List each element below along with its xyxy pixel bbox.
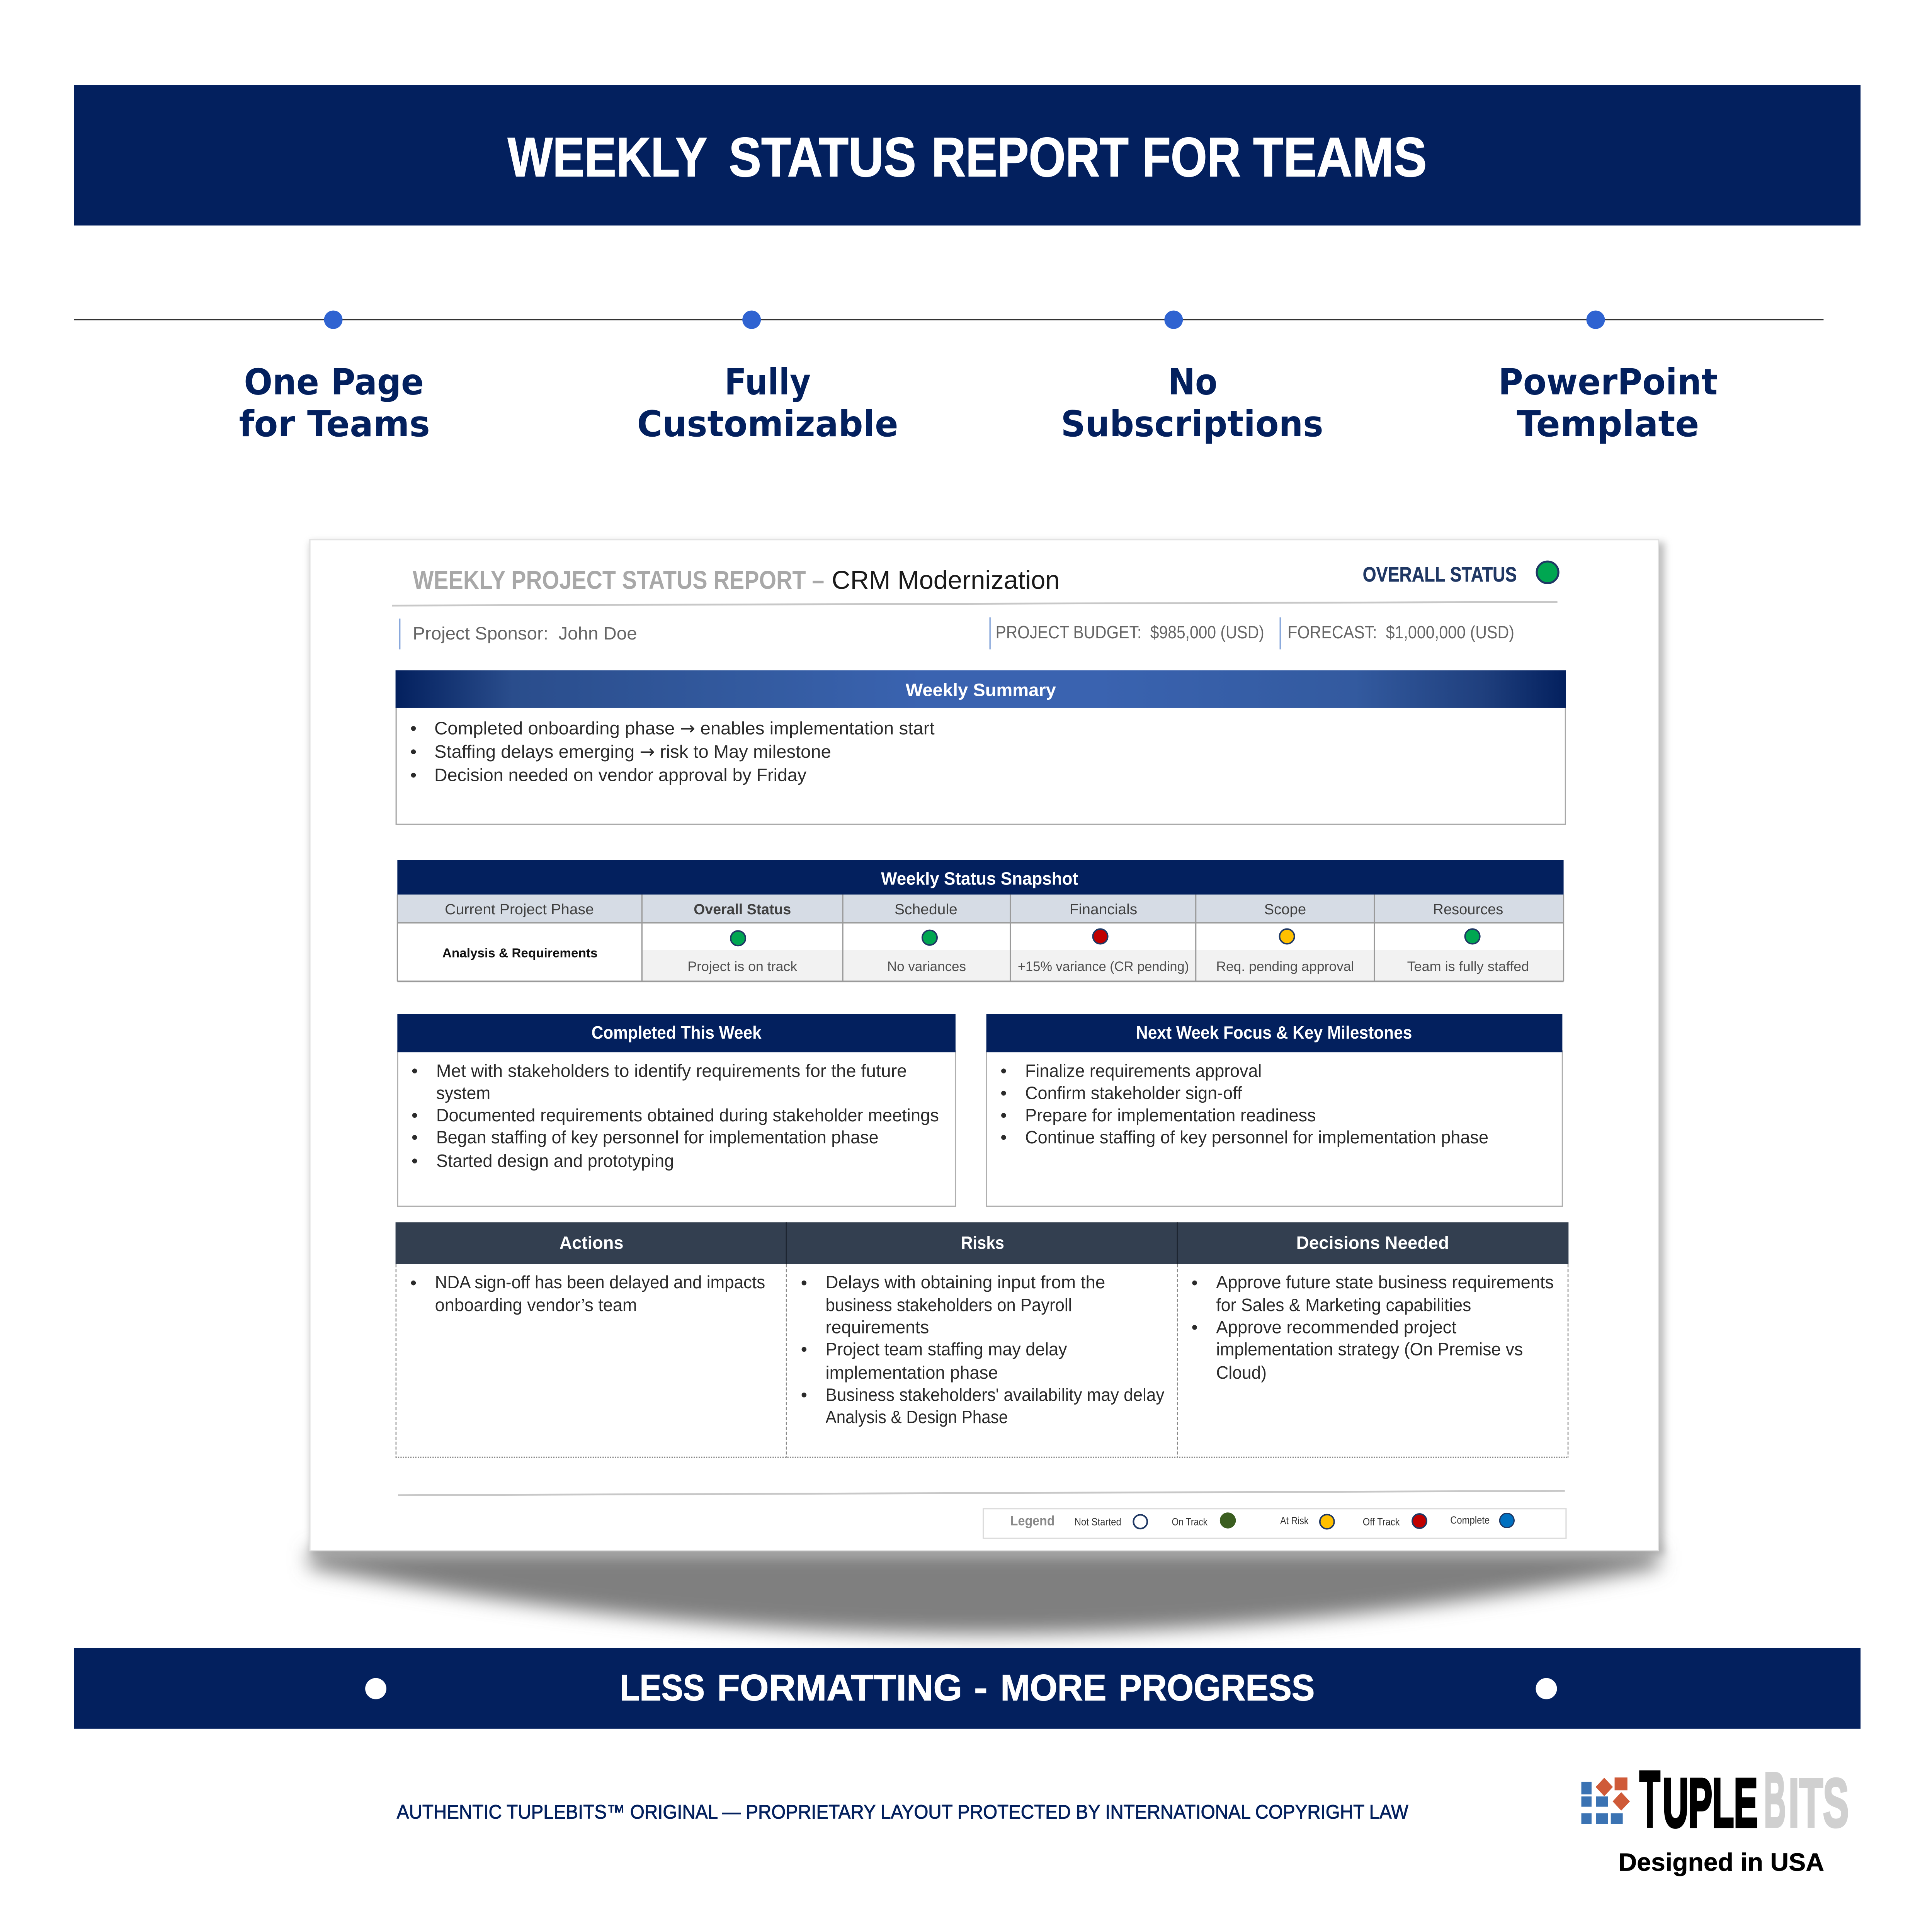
- panel: next week focus and key milestones: •: [1000, 1127, 1007, 1147]
- panel: completed this week: •: [412, 1151, 418, 1171]
- panel: weekly status snapshot: [397, 860, 1564, 981]
- feature: powerpoint template: Template: [1517, 403, 1699, 445]
- project meta: [400, 617, 1514, 649]
- panel: weekly status snapshot: +15% variance (CR pending): [1018, 959, 1189, 974]
- title banner: [74, 85, 1861, 226]
- panel: next week focus and key milestones: Finalize requirements approval: [1025, 1061, 1262, 1081]
- legend: Legend: [1010, 1514, 1055, 1529]
- column: actions: onboarding vendor’s team: [435, 1295, 637, 1315]
- designed in usa: Designed in USA: [1618, 1848, 1824, 1876]
- legend: Complete: [1450, 1514, 1490, 1526]
- panel: weekly summary: •: [410, 765, 417, 785]
- feature: fully customizable: Customizable: [637, 403, 898, 445]
- logo: tuplebits: T: [1639, 1754, 1660, 1844]
- project meta: PROJECT BUDGET: $985,000 (USD): [996, 622, 1264, 642]
- title: [508, 126, 1427, 188]
- feature: one page for teams: One Page: [244, 361, 424, 403]
- panel: weekly status snapshot: Analysis & Requirements: [442, 946, 598, 961]
- column: decisions needed: •: [1192, 1272, 1198, 1293]
- panel: completed this week: system: [436, 1083, 490, 1103]
- column: decisions needed: Approve future state business requirements: [1216, 1272, 1554, 1292]
- report title: CRM Modernization: [832, 566, 1060, 595]
- panel: weekly status snapshot: Req. pending approval: [1216, 959, 1354, 974]
- document preview panel: [310, 540, 1658, 1551]
- panel: completed this week: Met with stakeholders to identify requirements for the future: [436, 1061, 907, 1081]
- column: risks: requirements: [825, 1317, 929, 1337]
- logo: tuplebits: UPLE: [1663, 1764, 1758, 1841]
- column: risks: Delays with obtaining input from the: [825, 1272, 1105, 1292]
- panel: completed this week: •: [412, 1061, 418, 1081]
- feature: powerpoint template: [1498, 361, 1718, 445]
- feature: no subscriptions: No: [1168, 361, 1218, 403]
- panel: next week focus and key milestones: [986, 1014, 1562, 1206]
- panel: weekly summary: Weekly Summary: [906, 680, 1056, 700]
- tagline: FORMATTING: [717, 1667, 962, 1709]
- feature: powerpoint template: PowerPoint: [1498, 361, 1718, 403]
- column: decisions needed: Decisions Needed: [1296, 1233, 1449, 1253]
- panel: completed this week: Documented requirements obtained during stakeholder meetings: [436, 1105, 939, 1125]
- panel: next week focus and key milestones: Next Week Focus & Key Milestones: [1136, 1022, 1412, 1043]
- column: actions: [410, 1233, 765, 1315]
- panel: weekly summary: •: [410, 718, 417, 738]
- column: risks: [801, 1233, 1165, 1427]
- panel: weekly summary: Decision needed on vendor approval by Friday: [434, 765, 807, 785]
- title: FOR: [1142, 126, 1241, 188]
- panel: next week focus and key milestones: Confirm stakeholder sign-off: [1025, 1083, 1242, 1103]
- tagline: -: [974, 1667, 988, 1709]
- panel: next week focus and key milestones: •: [1000, 1061, 1007, 1081]
- report title: WEEKLY PROJECT STATUS REPORT –: [413, 566, 824, 595]
- panel: completed this week: Started design and prototyping: [436, 1151, 674, 1171]
- panel: next week focus and key milestones: Continue staffing of key personnel for implementation phase: [1025, 1127, 1488, 1147]
- tagline: LESS: [620, 1667, 705, 1709]
- column: risks: •: [801, 1339, 807, 1359]
- panel: next week focus and key milestones: Prepare for implementation readiness: [1025, 1105, 1316, 1125]
- tagline: [620, 1667, 1315, 1709]
- overall status indicator: OVERALL STATUS: [1363, 563, 1517, 586]
- panel: weekly status snapshot: Weekly Status Snapshot: [881, 869, 1078, 889]
- panel: weekly status snapshot: Financials: [1070, 901, 1137, 918]
- panel: weekly status snapshot: Team is fully staffed: [1407, 959, 1529, 974]
- title: STATUS: [729, 126, 916, 188]
- legend: [983, 1509, 1566, 1538]
- column: risks: •: [801, 1272, 807, 1293]
- panel: weekly status snapshot: Schedule: [895, 901, 957, 918]
- column: decisions needed: Approve recommended project: [1216, 1317, 1456, 1337]
- feature: no subscriptions: Subscriptions: [1061, 403, 1323, 445]
- title: WEEKLY: [508, 126, 707, 188]
- column: risks: •: [801, 1385, 807, 1405]
- column: risks: Project team staffing may delay: [825, 1339, 1067, 1359]
- panel: completed this week: [397, 1014, 956, 1206]
- panel: completed this week: Began staffing of key personnel for implementation phase: [436, 1127, 879, 1147]
- column: risks: business stakeholders on Payroll: [825, 1295, 1072, 1315]
- feature timeline: [74, 311, 1823, 329]
- panel: weekly status snapshot: Scope: [1264, 901, 1306, 918]
- panel: weekly status snapshot: Current Project Phase: [445, 901, 594, 918]
- column: decisions needed: for Sales & Marketing capabilities: [1216, 1295, 1471, 1315]
- logo: tuplebits: B: [1764, 1756, 1786, 1843]
- feature: no subscriptions: [1061, 361, 1323, 445]
- panel: weekly summary: •: [410, 742, 417, 762]
- column: decisions needed: Cloud): [1216, 1362, 1267, 1383]
- panel: weekly summary: Staffing delays emerging → risk to May milestone: [434, 741, 831, 762]
- column: actions: Actions: [560, 1233, 624, 1253]
- feature: fully customizable: Fully: [724, 361, 811, 403]
- column: risks: Business stakeholders' availability may delay: [825, 1385, 1165, 1405]
- feature: one page for teams: for Teams: [239, 403, 430, 445]
- panel: completed this week: •: [412, 1105, 418, 1125]
- feature: one page for teams: [239, 361, 430, 445]
- panel: weekly summary: [396, 670, 1566, 824]
- column: risks: Risks: [961, 1233, 1004, 1253]
- legend: Off Track: [1363, 1516, 1400, 1528]
- panel: weekly status snapshot: Overall Status: [694, 901, 791, 918]
- column: decisions needed: •: [1192, 1317, 1198, 1337]
- logo: tuplebits: [1581, 1754, 1849, 1844]
- legend: On Track: [1172, 1516, 1208, 1528]
- column: decisions needed: [1192, 1233, 1554, 1383]
- panel: actions risks decisions table: [396, 1222, 1568, 1458]
- project meta: Project Sponsor: John Doe: [413, 623, 637, 643]
- column: risks: implementation phase: [825, 1362, 998, 1383]
- column: decisions needed: implementation strategy (On Premise vs: [1216, 1339, 1523, 1359]
- legend: Not Started: [1075, 1516, 1121, 1528]
- column: risks: Analysis & Design Phase: [825, 1407, 1008, 1427]
- tagline banner: [74, 1648, 1861, 1729]
- title: REPORT: [932, 126, 1129, 188]
- column: actions: •: [410, 1272, 417, 1293]
- panel: next week focus and key milestones: •: [1000, 1105, 1007, 1125]
- legend: At Risk: [1280, 1515, 1309, 1527]
- feature: fully customizable: [637, 361, 898, 445]
- panel: completed this week: •: [412, 1127, 418, 1147]
- panel: weekly status snapshot: Resources: [1433, 901, 1503, 918]
- panel: weekly status snapshot: Project is on track: [687, 959, 798, 974]
- panel: completed this week: Completed This Week: [592, 1022, 762, 1043]
- title: TEAMS: [1253, 126, 1427, 188]
- document shadow: [309, 542, 1665, 1634]
- logo: tuplebits: ITS: [1789, 1764, 1849, 1841]
- panel: weekly status snapshot: No variances: [887, 959, 966, 974]
- panel: next week focus and key milestones: •: [1000, 1083, 1007, 1103]
- tagline: MORE: [1000, 1667, 1107, 1709]
- panel: weekly summary: Completed onboarding phase → enables implementation start: [434, 718, 935, 739]
- column: actions: NDA sign-off has been delayed and impacts: [435, 1272, 765, 1292]
- tagline: PROGRESS: [1119, 1667, 1315, 1709]
- project meta: FORECAST: $1,000,000 (USD): [1287, 622, 1514, 642]
- copyright notice: AUTHENTIC TUPLEBITS™ ORIGINAL — PROPRIETARY LAYOUT PROTECTED BY INTERNATIONAL COPYRIGHT LAW: [397, 1801, 1408, 1823]
